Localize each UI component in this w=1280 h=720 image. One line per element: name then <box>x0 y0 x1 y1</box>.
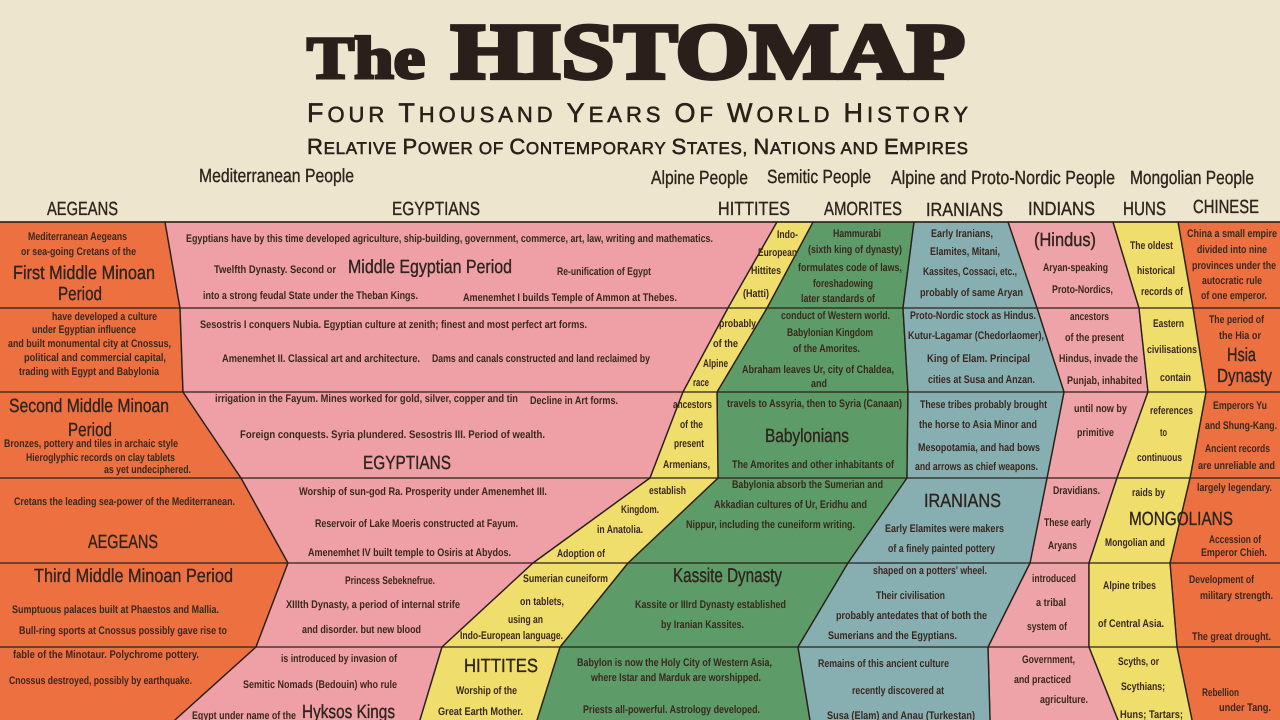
body text: Aryans <box>1048 540 1077 552</box>
body text: raids by <box>1132 487 1166 499</box>
body text: Aryan-speaking <box>1043 262 1108 274</box>
period names <box>9 263 233 587</box>
body text: primitive <box>1077 427 1114 439</box>
column headers: CHINESE <box>1193 197 1259 218</box>
body text: Alpine <box>703 358 728 370</box>
panel: egyptians <box>165 222 777 720</box>
column headers <box>47 197 1259 221</box>
body text: the horse to Asia Minor and <box>919 419 1037 431</box>
body text: and disorder. but new blood <box>302 624 421 636</box>
people group labels: Semitic People <box>767 167 871 188</box>
body text: European <box>758 247 797 259</box>
body text <box>818 228 1047 720</box>
body text: of the <box>713 338 738 350</box>
body text: Sesostris I conquers Nubia. Egyptian culture at zenith; finest and most perfect art forms. <box>200 319 587 331</box>
body text <box>186 233 713 720</box>
body text: Armenians, <box>663 459 710 471</box>
body text: of Central Asia. <box>1098 618 1164 630</box>
body text: Re-unification of Egypt <box>557 266 651 278</box>
period names: Third Middle Minoan Period <box>34 566 233 587</box>
people group labels <box>199 166 1254 189</box>
body text: Rebellion <box>1202 687 1239 699</box>
body text: the Hia or <box>1219 330 1262 342</box>
body text: Kassite or IIIrd Dynasty established <box>635 599 786 611</box>
body text: Cnossus destroyed, possibly by earthquake. <box>9 675 192 687</box>
body text <box>4 231 235 687</box>
body text: Kassites, Cossaci, etc., <box>923 266 1017 278</box>
body text: Sumerians and the Egyptians. <box>828 630 957 642</box>
body text: travels to Assyria, then to Syria (Canaan) <box>727 398 902 410</box>
body text: Babylon is now the Holy City of Western Asia, <box>577 657 772 669</box>
body text: Reservoir of Lake Moeris constructed at Fayum. <box>315 518 518 530</box>
body text: Cretans the leading sea-power of the Mediterranean. <box>14 496 235 508</box>
body text: Bronzes, pottery and tiles in archaic style <box>4 438 178 450</box>
body text: records of <box>1141 286 1183 298</box>
band shape <box>0 222 288 720</box>
body text: later standards of <box>801 293 875 305</box>
body text: These early <box>1044 517 1092 529</box>
body text: on tablets, <box>520 596 564 608</box>
column headers: AEGEANS <box>47 199 118 220</box>
body text: Remains of this ancient culture <box>818 658 949 670</box>
body text: Egyptians have by this time developed agriculture, ship-building, government, commerce, art, law, writing and mathematics. <box>186 233 713 245</box>
body text: Hammurabi <box>833 228 881 240</box>
column headers: INDIANS <box>1028 199 1095 220</box>
body text: ancestors <box>673 399 712 411</box>
body text: Proto-Nordics, <box>1052 284 1113 296</box>
body text: political and commercial capital, <box>24 352 166 364</box>
century divider lines <box>0 222 1280 647</box>
body text: Akkadian cultures of Ur, Eridhu and <box>714 499 867 511</box>
band shape <box>165 222 777 720</box>
period names: EGYPTIANS <box>363 453 451 474</box>
body text: Kutur-Lagamar (Chedorlaomer), <box>908 330 1044 342</box>
body text: Worship of the <box>456 685 517 697</box>
panel: amorites <box>536 222 914 720</box>
body text: Accession of <box>1209 534 1261 546</box>
body text: in Anatolia. <box>597 524 643 536</box>
body text: race <box>693 377 709 389</box>
body text <box>1187 228 1277 714</box>
title <box>307 9 965 96</box>
band shape <box>1089 222 1206 720</box>
body text: of the present <box>1065 332 1124 344</box>
body text: probably <box>719 318 757 330</box>
people group labels: Mediterranean People <box>199 166 354 187</box>
period name: HITTITES <box>464 656 538 677</box>
body text: The period of <box>1209 314 1264 326</box>
body text: Punjab, inhabited <box>1067 375 1142 387</box>
period name: Hsia <box>1227 345 1256 366</box>
body text: These tribes probably brought <box>920 399 1047 411</box>
body text <box>438 229 798 718</box>
body text: Amenemhet II. Classical art and architecture. <box>222 353 420 365</box>
period names: First Middle Minoan <box>13 263 155 284</box>
period names: AEGEANS <box>88 532 158 553</box>
body text: references <box>1150 405 1193 417</box>
body text: of the <box>680 419 703 431</box>
band shape <box>798 222 1064 720</box>
body text: of the Amorites. <box>793 343 860 355</box>
column headers: AMORITES <box>824 199 902 220</box>
body text: contain <box>1160 372 1191 384</box>
body text: formulates code of laws, <box>798 262 902 274</box>
body text: conduct of Western world. <box>781 310 890 322</box>
body text: agriculture. <box>1040 694 1088 706</box>
body text <box>1098 240 1197 720</box>
body text: is introduced by invasion of <box>281 653 397 665</box>
body text: irrigation in the Fayum. Mines worked for gold, silver, copper and tin <box>215 393 518 405</box>
body text: Government, <box>1022 654 1075 666</box>
body text: Mongolian and <box>1105 537 1165 549</box>
body text: autocratic rule <box>1202 275 1262 287</box>
body text: Hieroglyphic records on clay tablets <box>26 452 175 464</box>
period names: Middle Egyptian Period <box>348 257 512 278</box>
body text: Amenemhet I builds Temple of Ammon at Thebes. <box>463 292 677 304</box>
body text: King of Elam. Principal <box>927 353 1030 365</box>
people group labels: Alpine and Proto-Nordic People <box>891 168 1115 189</box>
band shape <box>419 222 813 720</box>
body text: Proto-Nordic stock as Hindus. <box>910 310 1036 322</box>
body text: XIIIth Dynasty, a period of internal strife <box>286 599 460 611</box>
body text: Scyths, or <box>1118 656 1160 668</box>
body text: until now by <box>1074 403 1128 415</box>
column headers: EGYPTIANS <box>392 199 480 220</box>
body text: trading with Egypt and Babylonia <box>19 366 160 378</box>
title: HISTOMAP <box>451 9 965 96</box>
body text: continuous <box>1137 452 1182 464</box>
body text: have developed a culture <box>52 311 157 323</box>
body text: and practiced <box>1014 674 1071 686</box>
body text: Emperors Yu <box>1213 400 1267 412</box>
body text: Elamites, Mitani, <box>930 246 1000 258</box>
body text: Adoption of <box>557 548 605 560</box>
body text: Princess Sebeknefrue. <box>345 575 435 587</box>
body text: into a strong feudal State under the Theban Kings. <box>203 290 418 302</box>
body text: recently discovered at <box>852 685 944 697</box>
panel: hittites <box>419 222 813 720</box>
title: The <box>307 25 425 91</box>
body text: (sixth king of dynasty) <box>808 244 902 256</box>
body text: Dravidians. <box>1053 485 1100 497</box>
body text: Decline in Art forms. <box>530 395 618 407</box>
body text: Dams and canals constructed and land reclaimed by <box>432 353 651 365</box>
body text: establish <box>649 485 686 497</box>
column headers: HUNS <box>1123 199 1166 220</box>
body text: to <box>1160 427 1167 439</box>
body text: Abraham leaves Ur, city of Chaldea, <box>742 364 894 376</box>
body text: where Istar and Marduk are worshipped. <box>590 672 761 684</box>
body text: Babylonia absorb the Sumerian and <box>732 479 883 491</box>
body text: The Amorites and other inhabitants of <box>732 459 894 471</box>
tagline: RELATIVE POWER OF CONTEMPORARY STATES, NATIONS AND EMPIRES <box>307 134 968 159</box>
body text: Kingdom. <box>621 504 659 516</box>
body text: Mesopotamia, and had bows <box>918 442 1040 454</box>
body text: civilisations <box>1147 344 1197 356</box>
body text: shaped on a potters' wheel. <box>873 565 987 577</box>
period names: Period <box>68 420 112 441</box>
period names: Kassite Dynasty <box>673 565 782 587</box>
panel: iranians <box>798 222 1064 720</box>
body text: under Tang. <box>1219 702 1271 714</box>
period names: Period <box>58 284 102 305</box>
body text <box>577 228 902 716</box>
column headers: HITTITES <box>718 199 790 220</box>
body text: under Egyptian influence <box>32 324 136 336</box>
period name <box>1217 345 1272 387</box>
body text: Hittites <box>751 265 781 277</box>
body text: Priests all-powerful. Astrology developed. <box>583 704 760 716</box>
body text: Nippur, including the cuneiform writing. <box>686 519 855 531</box>
period name: MONGOLIANS <box>1129 509 1233 530</box>
period names: Babylonians <box>765 426 849 447</box>
body text: foreshadowing <box>813 278 873 290</box>
body text: Amenemhet IV built temple to Osiris at Abydos. <box>308 547 511 559</box>
body text: (Hatti) <box>743 288 769 300</box>
body text <box>1014 262 1142 706</box>
body text: Babylonian Kingdom <box>787 327 873 339</box>
body text: of a finely painted pottery <box>888 543 996 555</box>
body text: and built monumental city at Cnossus, <box>8 338 171 350</box>
body text: ancestors <box>1070 311 1109 323</box>
body text: Scythians; <box>1121 681 1165 693</box>
body text: Early Iranians, <box>931 228 993 240</box>
body text: historical <box>1137 265 1175 277</box>
body text: using an <box>508 614 543 626</box>
subtitle: FOUR THOUSAND YEARS OF WORLD HISTORY <box>307 98 968 128</box>
body text: Sumptuous palaces built at Phaestos and Mallia. <box>12 604 219 616</box>
body text: Mediterranean Aegeans <box>28 231 127 243</box>
body text: a tribal <box>1036 597 1066 609</box>
panel: chinese <box>1170 222 1280 720</box>
body text: Sumerian cuneiform <box>523 573 608 585</box>
body text: Indo-European language. <box>460 630 563 642</box>
body text: Worship of sun-god Ra. Prosperity under Amenemhet III. <box>299 486 547 498</box>
body text: Eastern <box>1153 318 1184 330</box>
panel: indians <box>988 222 1148 720</box>
panel: aegeans <box>0 222 288 720</box>
body text: system of <box>1027 621 1067 633</box>
body text: Twelfth Dynasty. Second or <box>214 264 337 276</box>
people group labels: Mongolian People <box>1130 168 1254 189</box>
body text: The oldest <box>1130 240 1173 252</box>
body text: Hindus, invade the <box>1059 353 1138 365</box>
body text: and arrows as chief weapons. <box>915 461 1038 473</box>
body text: Early Elamites were makers <box>885 523 1004 535</box>
period names <box>302 257 512 720</box>
period names: Second Middle Minoan <box>9 396 169 417</box>
body text: present <box>674 438 704 450</box>
body text: Foreign conquests. Syria plundered. Sesostris III. Period of wealth. <box>240 429 545 441</box>
body text: Alpine tribes <box>1103 580 1156 592</box>
body text: fable of the Minotaur. Polychrome pottery. <box>13 649 199 661</box>
body text: cities at Susa and Anzan. <box>928 374 1035 386</box>
period name: IRANIANS <box>924 491 1001 512</box>
body text: probably antedates that of both the <box>836 610 987 622</box>
body text: Semitic Nomads (Bedouin) who rule <box>243 679 397 691</box>
band shape <box>988 222 1148 720</box>
body text: Great Earth Mother. <box>438 706 523 718</box>
panel: huns and mongolians <box>1089 222 1233 720</box>
body text: as yet undeciphered. <box>104 464 191 476</box>
period name: (Hindus) <box>1034 230 1096 251</box>
period names <box>673 426 849 587</box>
body text: Bull-ring sports at Cnossus possibly gave rise to <box>19 625 227 637</box>
band shape <box>536 222 914 720</box>
body text: or sea-going Cretans of the <box>21 246 136 258</box>
body text: and <box>811 378 827 390</box>
band shape <box>1170 222 1280 720</box>
people group labels: Alpine People <box>651 168 748 189</box>
body text: introduced <box>1032 573 1076 585</box>
body text: by Iranian Kassites. <box>661 619 744 631</box>
column headers: IRANIANS <box>926 200 1003 221</box>
body text: Development of <box>1189 574 1254 586</box>
body text: probably of same Aryan <box>920 287 1023 299</box>
body text: Their civilisation <box>876 590 945 602</box>
body text: Indo- <box>777 229 798 241</box>
